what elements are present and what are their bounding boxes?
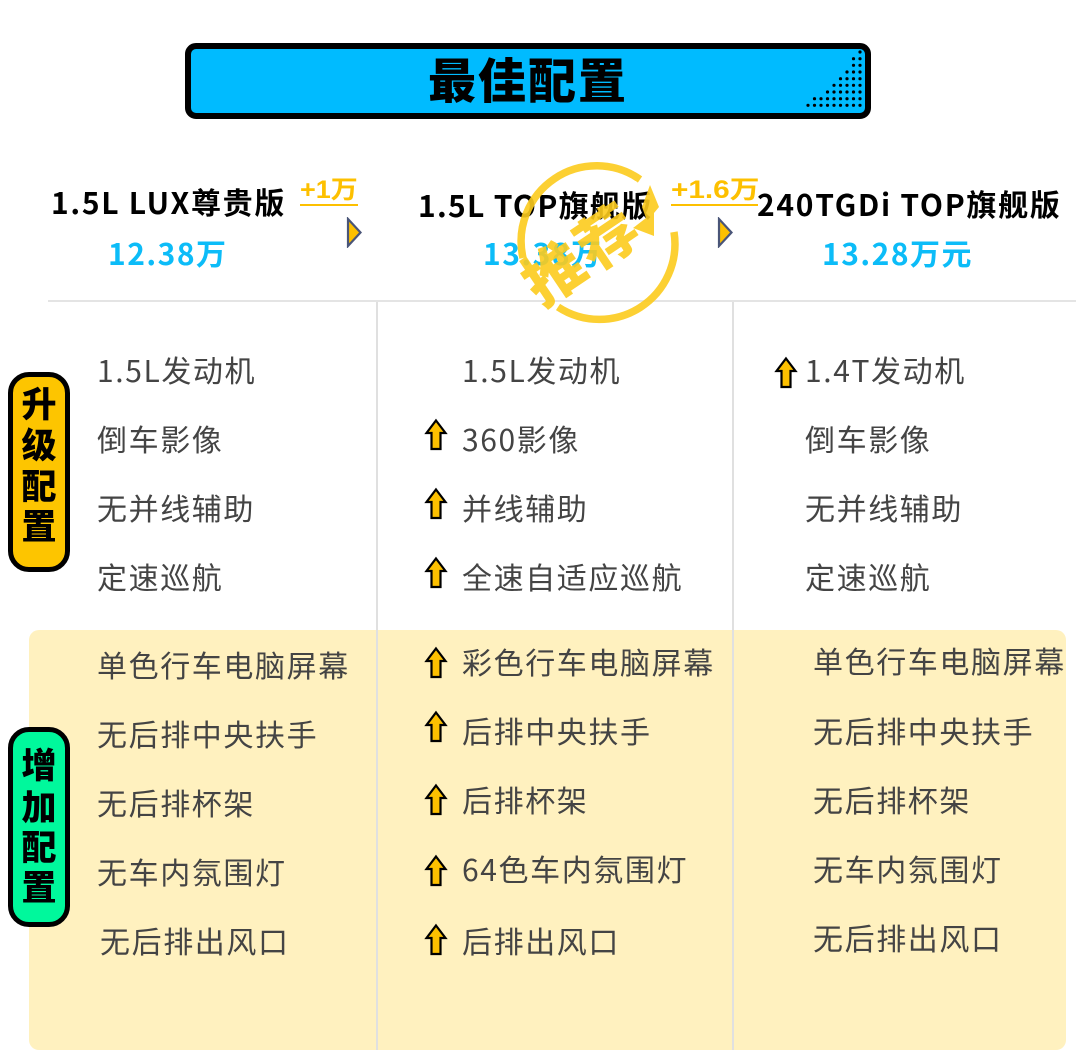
title banner: [185, 43, 871, 119]
highlighted panel: added features background: [29, 630, 1066, 1050]
side label: 增加配置: 增: [21, 738, 56, 789]
trim heading: 240TGDi TOP: 240TGDi TOP旗舰版: [757, 181, 1062, 225]
column 1 features: 无后排杯架: [97, 780, 255, 824]
arrow: step 2 to 3: [718, 217, 733, 248]
column 1 features: 无后排中央扶手: [97, 711, 318, 755]
column 1 features: 无车内氛围灯: [97, 849, 287, 893]
price: 13.28万元: 13.28万元: [822, 230, 973, 274]
side label: 增加配置: 配: [21, 820, 56, 871]
column 2 features: 全速自适应巡航: [462, 554, 683, 598]
column 2 features: 后排中央扶手: [462, 708, 652, 752]
side label: 增加配置: 加: [21, 780, 56, 831]
recommended stamp: [510, 162, 679, 324]
side label: 升级配置: [8, 372, 70, 572]
column 3 features: 倒车影像: [805, 416, 931, 460]
column 1 features: 倒车影像: [97, 416, 223, 460]
column 3 features: 无后排杯架: [813, 777, 971, 821]
side label: 增加配置: 置: [21, 860, 56, 911]
price step: +1.6万: +1.6万: [671, 176, 759, 204]
price step: +1万: +1万: [300, 176, 358, 204]
column 2 features: [462, 347, 715, 962]
column 3 features: 1.4T发动机: [805, 347, 966, 391]
side label: 升级配置: 置: [21, 499, 56, 550]
trim heading: 1.5L TOP: 1.5L TOP旗舰版: [418, 182, 653, 226]
column 2 features: 360影像: [462, 416, 580, 460]
column 3 features: 无后排中央扶手: [813, 708, 1034, 752]
column 3 features: 无后排出风口: [813, 915, 1003, 959]
trim heading: 1.5L LUX: 1.5L LUX尊贵版: [51, 179, 286, 223]
column 2 features: 1.5L发动机: [462, 347, 621, 391]
side label: 升级配置: 级: [21, 418, 56, 469]
side label: 升级配置: 配: [21, 459, 56, 510]
icon: halftone dot triangle: [806, 50, 862, 107]
arrow: step 1 to 2: [346, 217, 362, 248]
column 2 features: 64色车内氛围灯: [462, 846, 688, 890]
column 3 features: 定速巡航: [805, 554, 931, 598]
column 2 features: 后排出风口: [462, 918, 620, 962]
column 3 features: 无并线辅助: [805, 485, 963, 529]
column 3 features: 单色行车电脑屏幕: [813, 638, 1066, 682]
stamp arrow: [633, 185, 659, 236]
price: 12.38万: 12.38万: [108, 230, 228, 274]
column 1 features: 单色行车电脑屏幕: [97, 642, 350, 686]
column 1 features: 无并线辅助: [97, 485, 255, 529]
stamp ring: [521, 166, 675, 319]
column 1 features: 1.5L发动机: [97, 347, 256, 391]
column 2 features: 彩色行车电脑屏幕: [462, 639, 715, 683]
column 1 features: 定速巡航: [97, 554, 223, 598]
column 3 features: 无车内氛围灯: [813, 846, 1003, 890]
side label: 升级配置: 升: [21, 377, 56, 428]
column 1 features: 无后排出风口: [100, 918, 290, 962]
column 2 features: 并线辅助: [462, 485, 588, 529]
column 1 features: [97, 347, 350, 962]
price: 13.38万: 13.38万: [483, 230, 603, 274]
side label: 增加配置: [8, 727, 70, 927]
title text: 最佳配置: [428, 42, 628, 112]
column 2 features: 后排杯架: [462, 777, 588, 821]
